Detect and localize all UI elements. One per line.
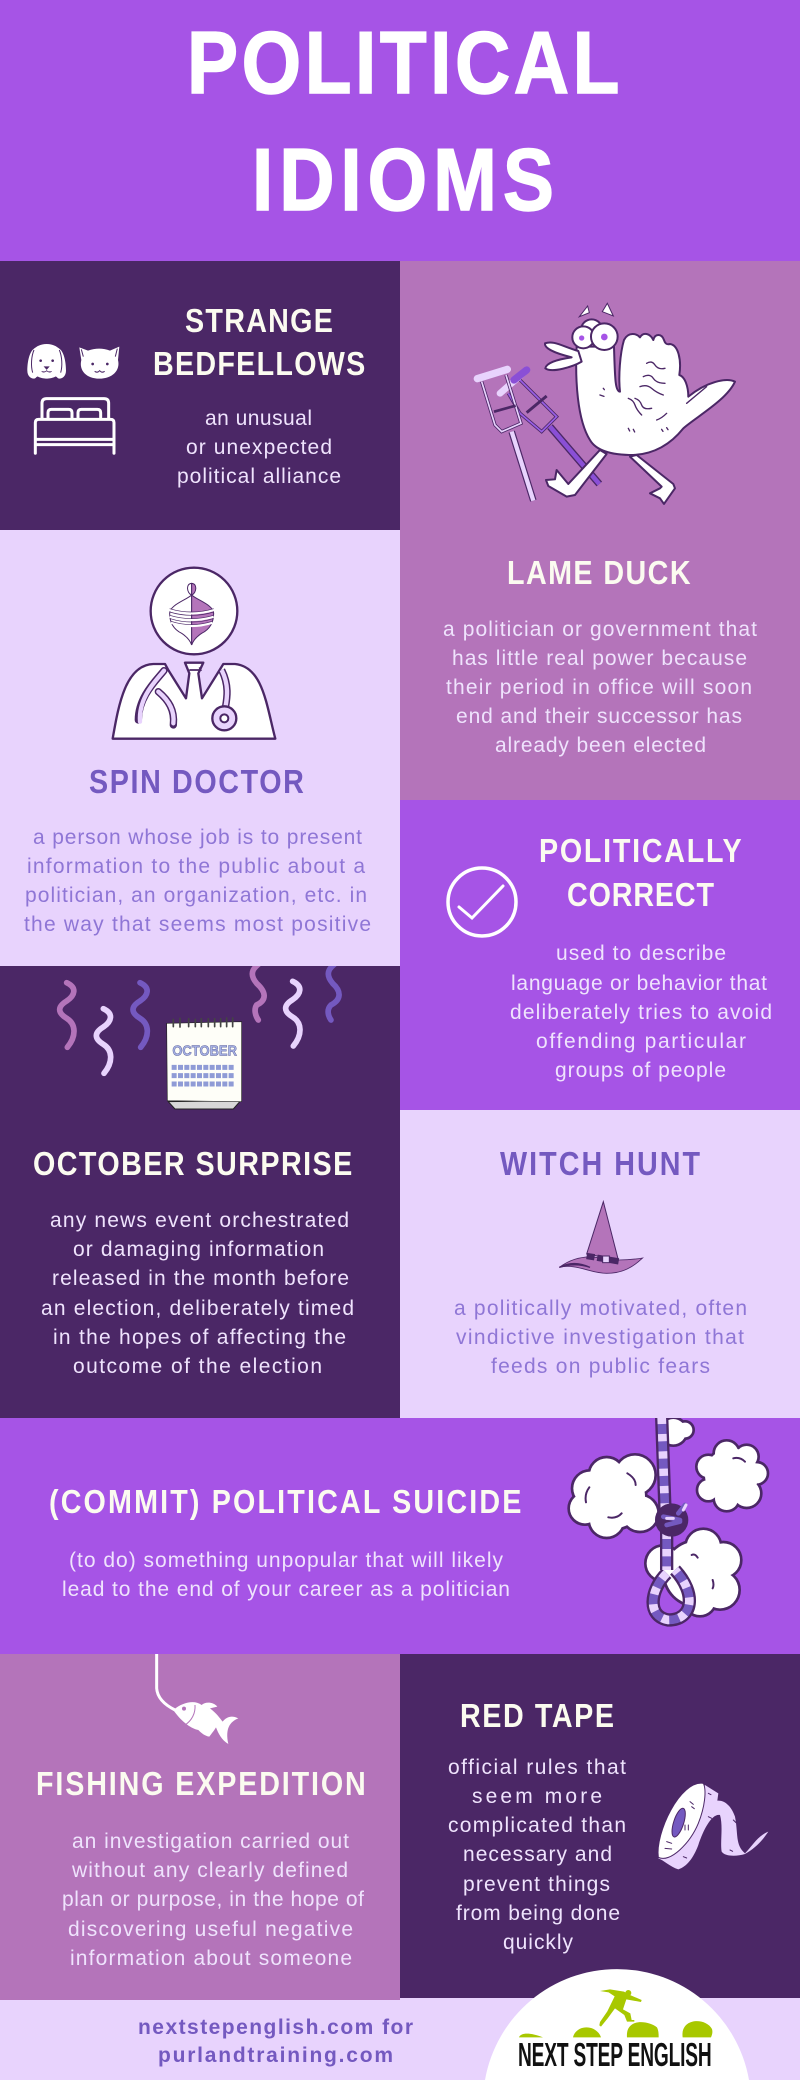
heading: RED TAPE [460, 1697, 614, 1734]
footer credits [138, 2016, 413, 2067]
description [24, 826, 371, 936]
description: official rules that [448, 1756, 626, 1779]
description: offending particular [536, 1030, 746, 1053]
description: discovering useful negative [68, 1918, 353, 1941]
heading: CORRECT [567, 876, 714, 913]
description: the way that seems most positive [24, 913, 371, 936]
description: complicated than [448, 1814, 626, 1837]
description: end and their successor has [456, 705, 742, 728]
heading [153, 302, 365, 382]
description: used to describe [556, 942, 726, 965]
description: information to the public about a [27, 855, 365, 878]
icon: calendar [167, 1018, 242, 1109]
description: released in the month before [52, 1267, 349, 1290]
description: without any clearly defined [71, 1859, 348, 1882]
description: quickly [503, 1931, 574, 1954]
description [177, 407, 341, 488]
heading: POLITICALLY [539, 832, 742, 869]
description: their period in office will soon [446, 676, 752, 699]
description: already been elected [495, 734, 706, 757]
description: has little real power because [452, 647, 747, 670]
description [62, 1549, 510, 1601]
icon: calendar: OCTOBER [172, 1043, 237, 1059]
description: outcome of the election [73, 1355, 322, 1378]
icon: witch hat [559, 1202, 643, 1273]
description [443, 618, 757, 757]
panel: spin doctor [0, 530, 400, 966]
panel: political suicide [0, 1417, 800, 1654]
heading: BEDFELLOWS [153, 345, 365, 382]
heading [539, 832, 742, 913]
title [187, 14, 619, 229]
description: politician, an organization, etc. in [25, 884, 367, 907]
description: an election, deliberately timed [41, 1297, 354, 1320]
footer credits: nextstepenglish.com for [138, 2016, 413, 2039]
logo: next step english [485, 1969, 749, 2080]
heading: SPIN DOCTOR [89, 763, 304, 800]
logo wordmark: NEXT STEP ENGLISH [518, 2037, 712, 2073]
icon: squiggles [60, 962, 339, 1073]
description: or damaging information [73, 1238, 324, 1261]
description: a politician or government that [443, 618, 757, 641]
icon: clouds and noose [570, 1417, 767, 1620]
description: political alliance [177, 465, 341, 488]
title: IDIOMS [252, 131, 554, 229]
description: feeds on public fears [491, 1355, 710, 1378]
description: deliberately tries to avoid [510, 1001, 772, 1024]
icon: check mark [448, 868, 516, 936]
description: or unexpected [186, 436, 332, 459]
panel: title header [0, 0, 800, 261]
heading: OCTOBER SURPRISE [33, 1145, 352, 1182]
panel: red tape [400, 1654, 800, 1998]
heading: WITCH HUNT [500, 1145, 700, 1182]
panel: strange bedfellows [0, 261, 400, 530]
description: language or behavior that [511, 972, 767, 995]
description: (to do) something unpopular that will likely [69, 1549, 504, 1572]
description: plan or purpose, in the hope of [62, 1888, 364, 1911]
panel: witch hunt [400, 1110, 800, 1418]
icon: bed [35, 399, 114, 453]
icon: runner and stepping stones [519, 1989, 712, 2037]
icon: fish on hook [157, 1654, 238, 1744]
description: information about someone [70, 1947, 352, 1970]
description: a person whose job is to present [33, 826, 362, 849]
panel: fishing expedition [0, 1654, 400, 2000]
description: groups of people [555, 1059, 726, 1082]
description: a politically motivated, often [454, 1297, 747, 1320]
description: lead to the end of your career as a politician [62, 1578, 510, 1601]
heading: (COMMIT) POLITICAL SUICIDE [49, 1483, 521, 1520]
panel: politically correct [400, 800, 800, 1110]
title: POLITICAL [187, 14, 619, 112]
description: seem more [472, 1785, 602, 1808]
description: from being done [456, 1902, 620, 1925]
icon: dog [27, 344, 66, 379]
heading: FISHING EXPEDITION [36, 1765, 366, 1802]
description: vindictive investigation that [456, 1326, 744, 1349]
description [510, 942, 772, 1082]
icon: tape roll [658, 1783, 768, 1869]
heading: LAME DUCK [507, 554, 691, 591]
icon: crutches [477, 369, 599, 501]
description: in the hopes of affecting the [53, 1326, 346, 1349]
icon: duck [545, 303, 735, 504]
icon: spin doctor [113, 568, 275, 739]
icon: cat [79, 347, 119, 379]
description: prevent things [463, 1873, 610, 1896]
description: an unusual [205, 407, 312, 430]
description [41, 1209, 354, 1378]
panel: october surprise [0, 962, 400, 1418]
heading: STRANGE [185, 302, 333, 339]
description [454, 1297, 747, 1378]
description: necessary and [463, 1843, 612, 1866]
footer credits: purlandtraining.com [158, 2044, 393, 2067]
description: an investigation carried out [72, 1830, 349, 1853]
description [448, 1756, 626, 1954]
description: any news event orchestrated [50, 1209, 349, 1232]
description [62, 1830, 364, 1970]
panel: lame duck [400, 261, 800, 800]
panel: footer [0, 1969, 800, 2080]
